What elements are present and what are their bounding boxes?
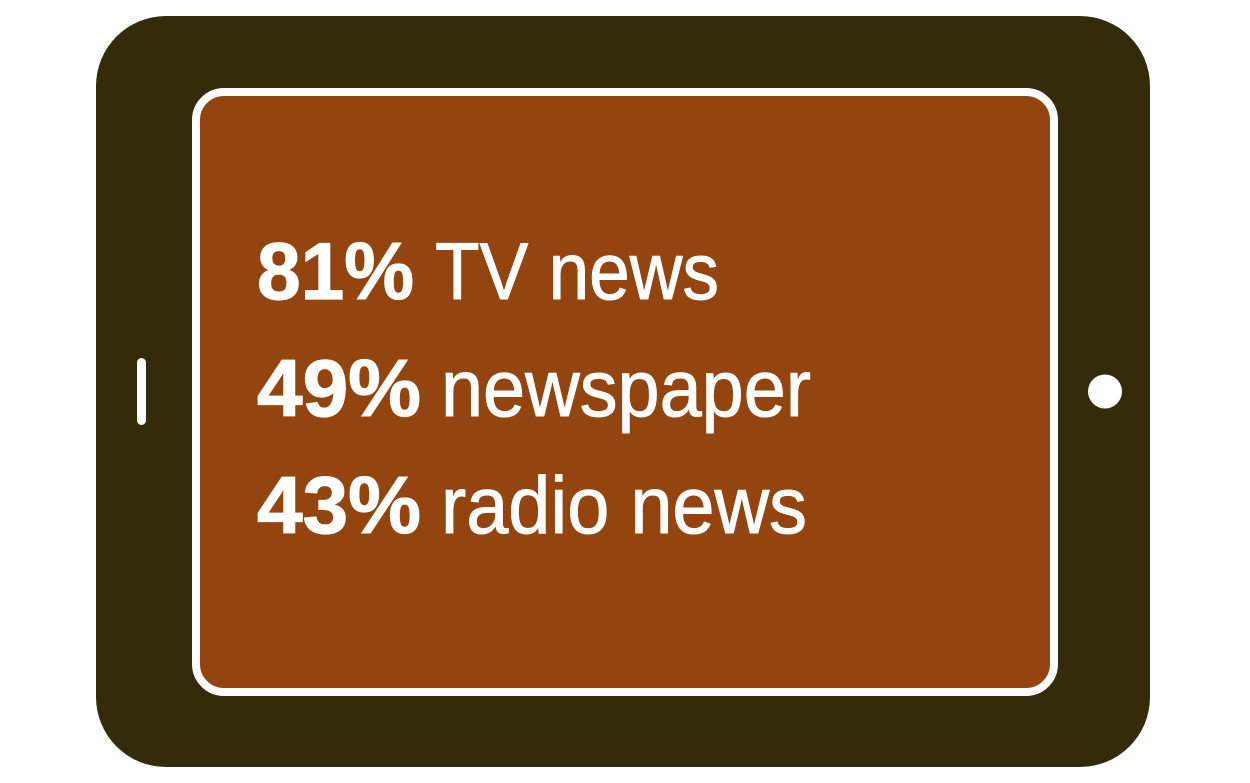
stat: TV news: 81% — [257, 227, 414, 317]
icon: speaker slot — [137, 358, 146, 425]
stat: newspaper: 49% — [257, 344, 421, 434]
stat: newspaper: newspaper — [441, 344, 811, 434]
stat: radio news: radio news — [441, 461, 807, 551]
stat: TV news — [257, 227, 719, 317]
stat: radio news: 43% — [257, 461, 421, 551]
screen — [196, 92, 1054, 692]
stat: radio news — [257, 461, 807, 551]
icon: home button — [1088, 374, 1122, 408]
stat: TV news: TV news — [435, 227, 719, 317]
stat: newspaper — [257, 344, 811, 434]
